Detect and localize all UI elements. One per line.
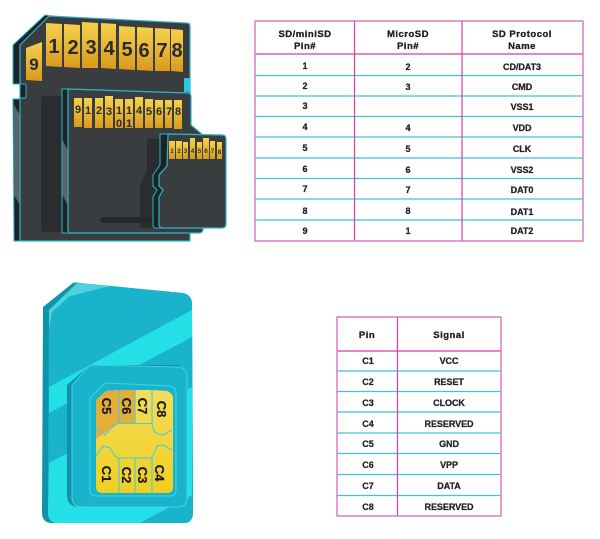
SIM contact labels: C4 xyxy=(152,465,167,482)
table rows: 1 xyxy=(406,226,411,236)
table rows: CD/DAT3 xyxy=(503,62,541,72)
table rows: C3 xyxy=(362,398,374,408)
SD card pins xyxy=(26,22,183,81)
table header xyxy=(278,29,552,52)
microSD card: 2 xyxy=(177,149,181,155)
table rows: 3 xyxy=(406,82,411,92)
table header: Signal xyxy=(433,330,465,341)
SIM contact labels xyxy=(99,398,169,483)
table rows: CLK xyxy=(513,144,532,154)
microSD card: 6 xyxy=(204,149,208,155)
SD card pins: 2 xyxy=(67,37,79,59)
table rows: 1 xyxy=(303,61,308,71)
table header: Pin# xyxy=(294,41,316,52)
table rows: 8 xyxy=(303,206,308,216)
table header: Name xyxy=(508,41,536,52)
table header: SD/miniSD xyxy=(278,29,332,40)
table rows: 4 xyxy=(406,123,411,133)
table rows: 7 xyxy=(303,184,308,194)
table rows: 6 xyxy=(303,164,308,174)
miniSD card: 1 xyxy=(85,105,91,117)
SD card pins: 3 xyxy=(85,37,97,59)
illustration: SIM card xyxy=(42,282,193,523)
table rows: 4 xyxy=(303,122,308,132)
SIM contact labels: C3 xyxy=(135,467,150,483)
microSD card: 8 xyxy=(218,150,222,156)
SIM contact labels: C8 xyxy=(154,401,169,417)
SD card pins: 9 xyxy=(29,55,39,74)
table: SD pinout xyxy=(255,21,583,241)
table rows: 8 xyxy=(406,206,411,216)
table rows: 7 xyxy=(406,185,411,195)
table rows: C4 xyxy=(362,419,374,429)
SIM contact labels: C1 xyxy=(99,466,114,482)
miniSD card xyxy=(62,89,203,233)
SIM contact labels: C5 xyxy=(99,398,114,414)
SIM contact labels: C2 xyxy=(119,467,134,483)
table rows: VSS1 xyxy=(511,102,533,112)
SD card pins: 8 xyxy=(171,40,183,62)
illustration: SD card with miniSD and microSD xyxy=(13,15,226,241)
table header xyxy=(359,330,465,341)
SD card pins: 1 xyxy=(48,36,60,58)
table rows: GND xyxy=(439,439,459,449)
table rows: 3 xyxy=(303,101,308,111)
microSD card: 5 xyxy=(198,149,202,155)
table rows xyxy=(303,61,541,236)
table rows: RESET xyxy=(434,377,464,387)
table rows: RESERVED xyxy=(425,419,474,429)
table rows: CMD xyxy=(512,82,533,92)
table rows: CLOCK xyxy=(433,398,465,408)
table header: Pin xyxy=(359,330,375,341)
miniSD card: 0 xyxy=(116,118,122,130)
SIM body xyxy=(42,282,193,523)
table rows: DAT0 xyxy=(511,185,533,195)
table rows xyxy=(362,356,474,512)
miniSD card: 7 xyxy=(166,106,172,118)
table rows: VDD xyxy=(513,123,532,133)
microSD card: 3 xyxy=(184,149,188,155)
miniSD card: 1 xyxy=(126,105,132,117)
microSD card xyxy=(153,134,226,228)
miniSD card: 9 xyxy=(75,104,81,116)
SIM contact labels: C6 xyxy=(119,398,134,414)
miniSD card: 4 xyxy=(136,105,143,117)
miniSD card: 5 xyxy=(146,106,152,118)
table rows: C2 xyxy=(362,377,374,387)
table rows: C6 xyxy=(362,460,374,470)
table rows: 9 xyxy=(303,226,308,236)
SIM holder xyxy=(67,365,187,507)
table rows: 5 xyxy=(406,144,411,154)
table rows: VCC xyxy=(440,356,459,366)
miniSD card: 3 xyxy=(106,106,112,118)
table rows: VPP xyxy=(440,460,458,470)
table rows: C1 xyxy=(362,356,374,366)
microSD card: 7 xyxy=(211,149,215,155)
miniSD card: 2 xyxy=(96,105,102,117)
table rows: DAT2 xyxy=(511,226,533,236)
miniSD card: 6 xyxy=(156,106,162,118)
miniSD card: 1 xyxy=(116,105,122,117)
table rows: DAT1 xyxy=(511,207,533,217)
SD card pins: 7 xyxy=(156,40,168,62)
table header: Pin# xyxy=(397,41,419,52)
table rows: 2 xyxy=(406,62,411,72)
table: SIM pinout xyxy=(337,317,501,516)
SD card pins: 6 xyxy=(138,40,150,62)
table rows: 6 xyxy=(406,165,411,175)
table rows: C8 xyxy=(362,502,374,512)
table header: MicroSD xyxy=(387,29,429,40)
table rows: C7 xyxy=(362,481,374,491)
miniSD card: 1 xyxy=(126,118,132,130)
SD card pins: 5 xyxy=(121,39,133,61)
table rows: VSS2 xyxy=(511,165,533,175)
miniSD card: 8 xyxy=(175,106,181,118)
table rows: 5 xyxy=(303,143,308,153)
table rows: DATA xyxy=(437,481,461,491)
SD card pins: 4 xyxy=(103,38,115,60)
microSD card: 1 xyxy=(170,149,174,155)
table rows: 2 xyxy=(303,81,308,91)
table header: SD Protocol xyxy=(492,29,552,40)
table rows: C5 xyxy=(362,439,374,449)
microSD card: 4 xyxy=(191,149,195,155)
chip contact lines xyxy=(96,390,172,493)
SIM contact labels: C7 xyxy=(135,398,150,414)
SD card body xyxy=(13,15,190,241)
SIM chip xyxy=(96,390,173,493)
table rows: RESERVED xyxy=(425,502,474,512)
